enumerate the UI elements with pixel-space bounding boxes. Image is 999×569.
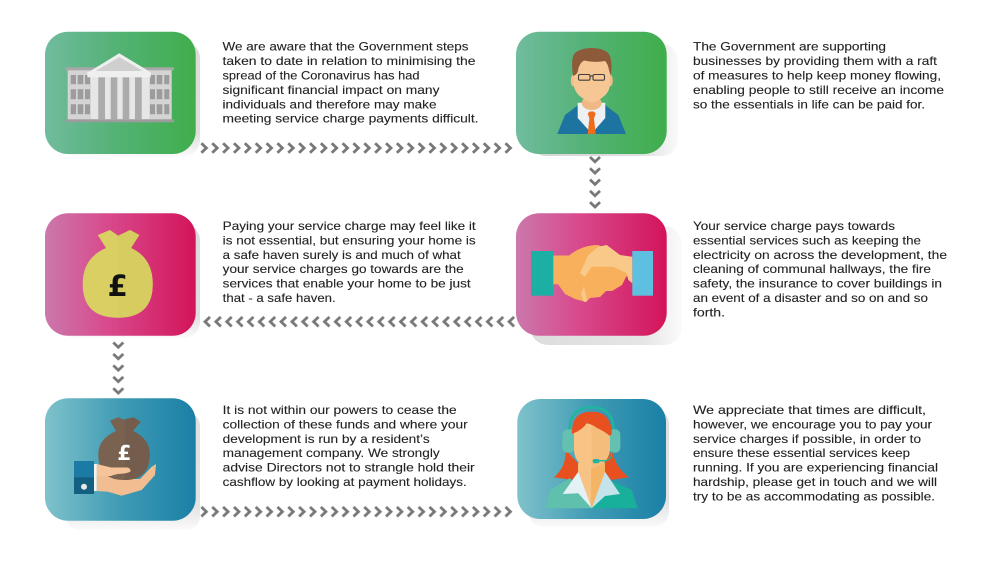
arrow: middle row chevrons pointing left [203,316,515,328]
panel: handshake card [516,213,682,345]
text block: advice to directors: cashflow by looking at payment holidays. [223,476,467,489]
panel: government building card [45,32,200,156]
icon: yellow money bag [83,230,153,318]
text block: closing message: running. If you are experiencing financial [693,462,938,475]
text block: government steps: individuals and therefore may make [222,98,436,111]
text block: safe haven: Paying your service charge may feel like it [223,220,477,233]
text block: government support: The Government are supporting [693,41,886,54]
text block: safe haven: that - a safe haven. [223,292,336,305]
panel: money bag card [45,213,200,338]
icon: woman with headset [545,407,638,508]
icon: government building [65,53,174,122]
text block: safe haven: your service charges go towards are the [223,263,464,276]
text block: advice to directors [223,404,475,489]
text block: safe haven: a safe haven surely is and much of what [223,249,462,262]
text block: what the service charge pays for: safety, the insurance to cover buildings in [693,278,942,291]
text block: advice to directors: development is run by a resident’s [223,433,430,446]
text block: government steps: taken to date in relation to minimising the [222,55,476,68]
text block: closing message: however, we encourage you to pay your [693,418,932,431]
arrow: right column chevrons pointing down [589,156,601,212]
text block: government steps: We are aware that the Government steps [222,41,469,54]
icon: hand holding money bag [74,417,156,496]
text block: government steps: spread of the Coronavirus has had [222,70,420,82]
text block: advice to directors: collection of these funds and where your [223,418,468,431]
text block: what the service charge pays for: cleaning of communal hallways, the fire [693,263,931,276]
arrow: top row chevrons pointing right [200,142,515,154]
text block: safe haven: is not essential, but ensuring your home is [223,234,476,247]
arrow: left column chevrons pointing down [112,341,124,398]
text block: safe haven [223,220,477,305]
icon: handshake [531,245,653,302]
text block: what the service charge pays for [693,220,947,319]
text block: closing message: try to be as accommodating as possible. [693,490,935,503]
text block: closing message: We appreciate that times are difficult, [693,404,926,417]
text block: government support: of measures to help keep money flowing, [693,70,941,82]
text block: government support: enabling people to still receive an income [693,84,944,97]
text block: what the service charge pays for: forth. [693,306,725,319]
text block: government steps [222,41,478,126]
text block: closing message: service charges if possible, in order to [693,433,921,446]
icon: white pound symbol: £ [117,441,131,465]
text block: what the service charge pays for: essential services such as keeping the [693,234,921,247]
panel: support agent card [517,399,669,527]
text block: advice to directors: It is not within our powers to cease the [223,404,457,417]
text block: closing message: ensure these essential services keep [693,447,910,460]
text block: what the service charge pays for: electricity on across the development, the [693,249,947,262]
text block: advice to directors: management company. We strongly [223,447,440,460]
text block: closing message [693,404,938,503]
text block: safe haven: services that enable your home to be just [223,278,472,291]
text block: advice to directors: advise Directors not to strangle hold their [223,462,475,475]
panel: businessman card [516,32,678,156]
arrow: bottom row chevrons pointing right [200,506,515,518]
text block: government steps: meeting service charge payments difficult. [222,113,478,126]
text block: what the service charge pays for: an event of a disaster and so on and so [693,292,928,305]
icon: businessman with glasses [557,48,626,134]
icon: pound symbol: £ [108,269,128,303]
text block: government steps: significant financial impact on many [222,84,440,97]
text block: government support [693,41,944,111]
text block: government support: so the essentials in life can be paid for. [693,98,925,111]
panel: hand holding money card [45,398,200,530]
text block: closing message: hardship, please get in touch and we will [693,476,937,489]
text block: government support: businesses by providing them with a raft [693,55,938,68]
text block: what the service charge pays for: Your service charge pays towards [693,220,895,233]
